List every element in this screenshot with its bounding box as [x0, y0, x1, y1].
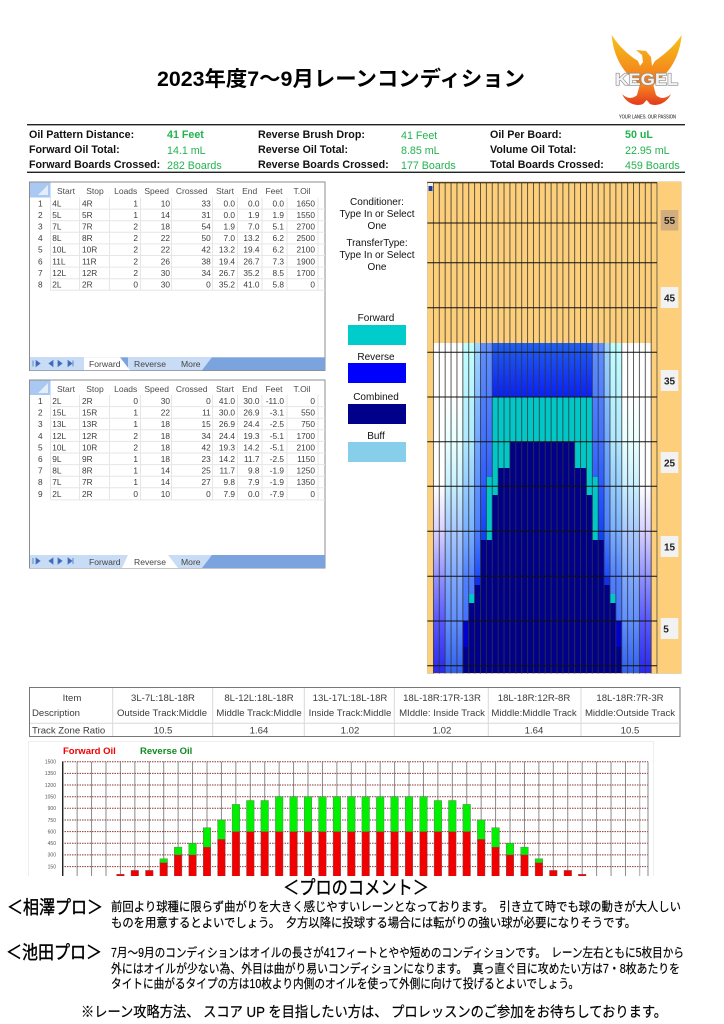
panel: reverse table: 10L	[52, 442, 67, 452]
panel: reverse table: 9L	[52, 454, 62, 464]
panel: reverse table: 34	[201, 431, 211, 441]
panel: reverse table: 26.9	[243, 408, 260, 418]
summary panel: oil statistics: Forward Oil Total:	[29, 144, 120, 156]
sheet tabs: forward active: Reverse	[134, 359, 166, 369]
summary panel: oil statistics: 282 Boards	[167, 160, 222, 172]
panel: reverse table: 2R	[82, 489, 93, 499]
oil bar chart	[28, 742, 654, 882]
panel: forward table: 19.4	[243, 245, 260, 255]
panel: forward table: 7R	[82, 222, 93, 232]
panel: reverse table: 14	[161, 466, 170, 476]
panel: forward table: 13.2	[243, 233, 260, 243]
panel: reverse table: 0	[206, 396, 211, 406]
panel: forward table: 1.9	[272, 210, 284, 220]
track zone ratio table: Description	[32, 708, 80, 719]
track zone ratio table: Inside Track:Middle	[309, 708, 391, 719]
panel: reverse table: 7.9	[248, 477, 260, 487]
panel: reverse table: 42	[201, 442, 211, 452]
panel: reverse table: Start	[216, 384, 235, 394]
chart legend	[63, 746, 192, 757]
logo: Kegel phoenix	[612, 35, 682, 120]
panel: reverse table: 0	[310, 396, 315, 406]
panel: forward table: 5.8	[272, 280, 284, 290]
panel: forward table: 6	[38, 256, 43, 266]
conditioner and transfer type text: Conditioner:	[350, 197, 404, 208]
panel: forward table: 33	[201, 198, 211, 208]
sheet tabs: reverse active: Reverse	[134, 557, 166, 567]
panel: reverse table: 7R	[82, 477, 93, 487]
panel: forward table: 11R	[82, 256, 97, 266]
panel: reverse table: 19.3	[243, 431, 260, 441]
panel: forward table: 0.0	[223, 198, 235, 208]
panel: reverse table: 18	[161, 454, 170, 464]
panel: reverse table: 15R	[82, 408, 97, 418]
panel: forward table: 1	[133, 210, 138, 220]
panel: forward table: 0.0	[272, 198, 284, 208]
panel: forward table: Start	[216, 186, 235, 196]
panel: reverse table: 26.9	[219, 419, 235, 429]
panel: forward table: 2	[133, 245, 138, 255]
panel: forward table: 5	[38, 245, 43, 255]
panel: reverse table: Loads	[114, 384, 137, 394]
track zone ratio table	[30, 688, 680, 736]
track zone ratio table: Outside Track:Middle	[117, 708, 207, 719]
track zone ratio table: 1.02	[433, 726, 451, 736]
panel: reverse table: 8	[38, 477, 43, 487]
lane distance labels: 25	[664, 458, 675, 470]
panel: reverse table: Speed	[144, 384, 169, 394]
sheet tabs: reverse active: Forward	[89, 557, 121, 567]
legend: oil colours: Combined	[353, 392, 399, 403]
panel: reverse table: 14	[161, 477, 170, 487]
panel: reverse table: -5.1	[270, 442, 284, 452]
panel: reverse table: 1	[133, 477, 138, 487]
conditioner and transfer type text: One	[368, 262, 387, 273]
logo: Kegel phoenix: KEGEL	[615, 70, 678, 89]
panel: reverse table: 8R	[82, 466, 93, 476]
y axis labels: 1200	[45, 783, 56, 789]
panel: reverse table: 0	[133, 396, 138, 406]
panel: reverse table: 22	[161, 408, 170, 418]
panel: reverse table: -1.9	[270, 466, 284, 476]
panel: forward table: 34	[201, 268, 211, 278]
panel: forward table: 13.2	[219, 245, 235, 255]
track zone ratio table: Item	[63, 693, 81, 704]
track zone ratio table: 18L-18R:7R-3R	[596, 693, 664, 704]
panel: reverse table: 12L	[52, 431, 67, 441]
panel: forward table: 1700	[297, 268, 315, 278]
summary panel: oil statistics: 22.95 mL	[625, 145, 670, 157]
track zone ratio table: 18L-18R:17R-13R	[403, 693, 481, 704]
y axis labels: 900	[48, 806, 56, 812]
conditioner and transfer type text: TransferType:	[346, 238, 408, 249]
panel: forward table: 6.2	[272, 233, 284, 243]
panel: reverse table: 41.0	[219, 396, 235, 406]
panel: reverse table: 2L	[52, 396, 62, 406]
lane distance labels: 35	[664, 376, 675, 388]
panel: forward table: 1	[133, 198, 138, 208]
pro name: Aizawa: ＜相澤プロ＞	[7, 897, 103, 918]
panel: forward table: 7.0	[248, 222, 260, 232]
track zone ratio table: Middle Track:Middle	[216, 708, 302, 719]
panel: reverse table: 550	[301, 408, 315, 418]
summary panel: oil statistics: Oil Pattern Distance:	[29, 129, 134, 141]
panel: forward table: 2700	[297, 222, 315, 232]
lane distance labels: 5	[663, 624, 669, 636]
panel: forward table: 3	[38, 222, 43, 232]
track zone ratio table: MIddle: Inside Track	[399, 708, 485, 719]
summary panel: oil statistics: Reverse Boards Crossed:	[258, 159, 389, 171]
combined oil zone	[463, 442, 622, 673]
panel: reverse table: 1250	[297, 466, 315, 476]
comment text: Aizawa	[111, 899, 681, 930]
panel: reverse table: 5	[38, 442, 43, 452]
panel: forward table: 5L	[52, 210, 62, 220]
panel: forward table: 18	[161, 222, 170, 232]
panel: forward table: 22	[161, 245, 170, 255]
panel: reverse table: 2	[38, 408, 43, 418]
comment text: Ikeda	[111, 945, 684, 991]
panel: reverse table: 750	[301, 419, 315, 429]
panel: forward table	[30, 182, 325, 370]
logo: Kegel phoenix: YOUR LANES. OUR PASSION	[619, 114, 676, 120]
panel: reverse table: 1700	[297, 431, 315, 441]
track zone ratio table: 8L-12L:18L-18R	[224, 693, 294, 704]
sheet tabs: forward active	[30, 357, 325, 370]
panel: reverse table: 0	[133, 489, 138, 499]
panel: reverse table: 2100	[297, 442, 315, 452]
summary panel: oil statistics: Total Boards Crossed:	[490, 159, 604, 171]
lane distance labels	[661, 210, 678, 639]
panel: forward table: 10R	[82, 245, 97, 255]
panel: forward table: 1.9	[223, 222, 235, 232]
summary panel: oil statistics: 459 Boards	[625, 160, 680, 172]
panel: reverse table: 11	[202, 408, 211, 418]
panel: forward table: Stop	[86, 186, 104, 196]
panel: reverse table: 30	[161, 396, 170, 406]
panel: reverse table: 12R	[82, 431, 97, 441]
panel: forward table: 31	[201, 210, 211, 220]
panel: forward table: 7L	[52, 222, 62, 232]
title: 2023年度7～9月レーンコンディション	[157, 67, 525, 91]
panel: reverse table: 2R	[82, 396, 93, 406]
panel: reverse table: 0.0	[248, 489, 260, 499]
panel: forward table: 42	[201, 245, 211, 255]
panel: reverse table: 1150	[297, 454, 315, 464]
panel: forward table: 30	[161, 280, 170, 290]
panel: reverse table: 18	[161, 442, 170, 452]
lane distance labels: 15	[664, 542, 675, 554]
panel: reverse table: End	[242, 384, 258, 394]
panel: reverse table: -11.0	[266, 396, 284, 406]
panel: forward table: 8R	[82, 233, 93, 243]
comment text: Ikeda: タイトに曲がるタイプの方は10枚より内側のオイルを使って外側に向けて投げるとよいでしょう。	[111, 976, 579, 991]
panel: reverse table: 18	[161, 431, 170, 441]
panel: reverse table: 13R	[82, 419, 97, 429]
y axis labels: 1500	[45, 760, 56, 766]
panel: reverse table: 23	[201, 454, 211, 464]
y axis labels: 1350	[45, 771, 56, 777]
forward oil zone	[469, 397, 616, 603]
panel: reverse table: 18	[161, 419, 170, 429]
chart legend: Forward Oil	[63, 746, 116, 757]
panel: reverse table: 9.8	[223, 477, 235, 487]
y axis labels: 750	[48, 818, 56, 824]
panel: reverse table: 9	[38, 489, 43, 499]
panel: reverse table: -2.5	[270, 419, 284, 429]
track zone ratio table: Middle:Middle Track	[491, 708, 577, 719]
panel: forward table: 38	[201, 256, 211, 266]
panel: forward table: 0	[133, 280, 138, 290]
panel: forward table: 2	[38, 210, 43, 220]
panel: reverse table: 11.7	[244, 454, 260, 464]
panel: forward table: 54	[201, 222, 211, 232]
panel: forward table: 41.0	[243, 280, 260, 290]
panel: forward table: 2	[133, 268, 138, 278]
panel: reverse table	[30, 380, 325, 568]
panel: reverse table: 0	[310, 489, 315, 499]
track zone ratio table: 10.5	[154, 726, 172, 736]
conditioner and transfer type text: Type In or Select	[339, 250, 415, 261]
y axis labels: 600	[48, 829, 56, 835]
panel: reverse table: 8L	[52, 466, 62, 476]
panel: forward table: 6.2	[272, 245, 284, 255]
panel: reverse table: 2L	[52, 489, 62, 499]
panel: reverse table: 30.0	[219, 408, 235, 418]
panel: reverse table: 9.8	[248, 466, 260, 476]
panel: forward table: Start	[57, 186, 76, 196]
panel: reverse table: Start	[57, 384, 76, 394]
y axis labels: 150	[48, 864, 56, 870]
panel: forward table: 4L	[52, 198, 62, 208]
panel: reverse table: 1	[133, 466, 138, 476]
transition blue blocks	[463, 576, 622, 647]
panel: reverse table: -5.1	[270, 431, 284, 441]
panel: forward table: 11L	[52, 256, 66, 266]
panel: forward table: 14	[161, 210, 170, 220]
panel: forward table: 50	[201, 233, 211, 243]
panel: reverse table: 1	[133, 408, 138, 418]
track zone ratio table: 13L-17L:18L-18R	[313, 693, 387, 704]
panel: forward table: 1650	[297, 198, 315, 208]
panel: reverse table: 10	[161, 489, 170, 499]
panel: forward table: 2	[133, 256, 138, 266]
panel: reverse table: Stop	[86, 384, 104, 394]
panel: reverse table: 27	[201, 477, 211, 487]
panel: forward table: 8	[38, 280, 43, 290]
sheet tabs: forward active: Forward	[89, 359, 121, 369]
panel: forward table: 26.7	[219, 268, 235, 278]
panel: reverse table: Crossed	[176, 384, 208, 394]
panel: forward table: 7.3	[272, 256, 284, 266]
panel: forward table: Loads	[114, 186, 137, 196]
panel: forward table: 10L	[52, 245, 67, 255]
summary panel: oil statistics: 14.1 mL	[167, 145, 206, 157]
panel: reverse table: 24.4	[219, 431, 235, 441]
panel: reverse table: 2	[133, 431, 138, 441]
panel: forward table: 19.4	[219, 256, 235, 266]
panel: forward table: 0.0	[248, 198, 260, 208]
panel: forward table: 26	[161, 256, 170, 266]
panel: reverse table: 2	[133, 442, 138, 452]
comment text: Aizawa: ものを用意するとよいでしょう。 夕方以降に投球する場合には転がりの強い球が必要になりそうです。	[111, 915, 636, 930]
panel: reverse table: 7L	[52, 477, 62, 487]
summary panel: oil statistics	[27, 124, 685, 173]
sheet tabs: reverse active: More	[181, 557, 201, 567]
track zone ratio table: 3L-7L:18L-18R	[131, 693, 195, 704]
panel: reverse table: -7.9	[270, 489, 284, 499]
panel: reverse table: 25	[201, 466, 211, 476]
legend: oil colours: Buff	[367, 431, 385, 442]
panel: reverse table: 7	[38, 466, 43, 476]
chart legend: Reverse Oil	[140, 746, 192, 757]
panel: reverse table: 9R	[82, 454, 93, 464]
sheet tabs: forward active: More	[181, 359, 201, 369]
panel: reverse table: 6	[38, 454, 43, 464]
panel: reverse table: 4	[38, 431, 43, 441]
summary panel: oil statistics: 41 Feet	[401, 130, 437, 142]
panel: forward table: 1550	[297, 210, 315, 220]
reverse oil bars	[160, 797, 543, 864]
panel: reverse table: 10R	[82, 442, 97, 452]
summary panel: oil statistics: Oil Per Board:	[490, 129, 562, 141]
reverse oil zone	[492, 343, 592, 397]
panel: reverse table: 1350	[297, 477, 315, 487]
panel: reverse table: -1.9	[270, 477, 284, 487]
panel: reverse table: 14.2	[243, 442, 260, 452]
conditioner and transfer type text: One	[368, 221, 387, 232]
legend: oil colours: Forward	[358, 313, 394, 324]
track zone ratio table: Track Zone Ratio	[32, 726, 105, 736]
panel: reverse table: 14.2	[219, 454, 235, 464]
panel: reverse table: 7.9	[223, 489, 235, 499]
comments section	[0, 876, 724, 1024]
track zone ratio table: Middle:Outside Track	[585, 708, 675, 719]
panel: forward table: 2	[133, 222, 138, 232]
summary panel: oil statistics: Reverse Oil Total:	[258, 144, 348, 156]
panel: forward table: Speed	[144, 186, 169, 196]
panel: forward table: 2L	[52, 280, 62, 290]
y axis labels	[45, 760, 56, 870]
panel: forward table: 0	[310, 280, 315, 290]
panel: reverse table: T.Oil	[294, 384, 311, 394]
panel: forward table: 30	[161, 268, 170, 278]
panel: reverse table: 24.4	[243, 419, 260, 429]
panel: reverse table: 3	[38, 419, 43, 429]
panel: reverse table: 15	[201, 419, 211, 429]
summary panel: oil statistics: Reverse Brush Drop:	[258, 129, 365, 141]
panel: forward table: 5R	[82, 210, 93, 220]
panel: forward table: Feet	[265, 186, 283, 196]
legend: oil colours: Reverse	[357, 352, 395, 363]
summary panel: oil statistics: Forward Boards Crossed:	[29, 159, 160, 171]
panel: reverse table: Feet	[265, 384, 283, 394]
panel: forward table: 1900	[297, 256, 315, 266]
panel: forward table: 35.2	[243, 268, 260, 278]
summary panel: oil statistics: 177 Boards	[401, 160, 456, 172]
panel: forward table: Crossed	[176, 186, 208, 196]
sheet tabs: reverse active	[30, 555, 325, 568]
conditioner and transfer type text: Type In or Select	[339, 209, 415, 220]
summary panel: oil statistics: 50 uL	[625, 129, 653, 141]
panel: forward table: 2100	[297, 245, 315, 255]
closing note: ※レーン攻略方法、 スコア UP を目指したい方は、 プロレッスンのご参加をお待ちしております。	[81, 1004, 667, 1021]
panel: reverse table: 19.3	[219, 442, 235, 452]
panel: reverse table: 1	[133, 419, 138, 429]
panel: forward table: 35.2	[219, 280, 235, 290]
panel: reverse table: 1	[38, 396, 43, 406]
panel: forward table: 4	[38, 233, 43, 243]
panel: reverse table: 13L	[52, 419, 67, 429]
conditioner and transfer type text	[339, 197, 415, 273]
panel: reverse table: 11.7	[219, 466, 235, 476]
panel: forward table: 2	[133, 233, 138, 243]
panel: forward table: End	[242, 186, 258, 196]
panel: forward table: 1.9	[248, 210, 260, 220]
pro name: Ikeda: ＜池田プロ＞	[6, 942, 102, 963]
forward oil bars	[117, 832, 586, 881]
y axis labels: 1050	[45, 794, 56, 800]
y axis labels: 450	[48, 841, 56, 847]
lane distance labels: 45	[664, 294, 675, 304]
track zone ratio table: 10.5	[621, 726, 639, 736]
panel: reverse table: -3.1	[270, 408, 284, 418]
panel: reverse table: 30.0	[243, 396, 260, 406]
panel: forward table: 4R	[82, 198, 93, 208]
panel: forward table: 0.0	[223, 210, 235, 220]
legend: oil colours	[348, 313, 406, 462]
panel: forward table: 12R	[82, 268, 97, 278]
track zone ratio table: 18L-18R:12R-8R	[498, 693, 570, 704]
panel: forward table: 8L	[52, 233, 62, 243]
panel: forward table: 5.1	[272, 222, 284, 232]
panel: reverse table: -2.5	[270, 454, 284, 464]
summary panel: oil statistics: 8.85 mL	[401, 145, 440, 157]
oil buff gradients	[433, 343, 651, 673]
panel: forward table: 12L	[52, 268, 67, 278]
summary panel: oil statistics: Volume Oil Total:	[490, 144, 576, 156]
lane oil pattern graph	[427, 182, 681, 673]
panel: forward table: T.Oil	[294, 186, 311, 196]
y axis labels: 300	[48, 853, 56, 859]
panel: forward table: 2500	[297, 233, 315, 243]
panel: forward table: 7.0	[223, 233, 235, 243]
panel: forward table: 7	[38, 268, 43, 278]
panel: forward table: 1	[38, 198, 43, 208]
small marker	[428, 183, 433, 191]
track zone ratio table: 1.02	[341, 726, 359, 736]
panel: forward table: 8.5	[272, 268, 284, 278]
comments heading: ＜プロのコメント＞	[283, 877, 429, 899]
panel: forward table: 0	[206, 280, 211, 290]
track zone ratio table: 1.64	[250, 726, 269, 736]
panel: reverse table: 1	[133, 454, 138, 464]
summary panel: oil statistics: 41 Feet	[167, 129, 204, 141]
panel: reverse table: 15L	[52, 408, 67, 418]
panel: reverse table: 0	[206, 489, 211, 499]
panel: forward table: 10	[161, 198, 170, 208]
panel: forward table: 26.7	[243, 256, 260, 266]
panel: forward table: 2R	[82, 280, 93, 290]
lane distance labels: 55	[664, 216, 675, 227]
track zone ratio table: 1.64	[525, 726, 544, 736]
panel: forward table: 22	[161, 233, 170, 243]
